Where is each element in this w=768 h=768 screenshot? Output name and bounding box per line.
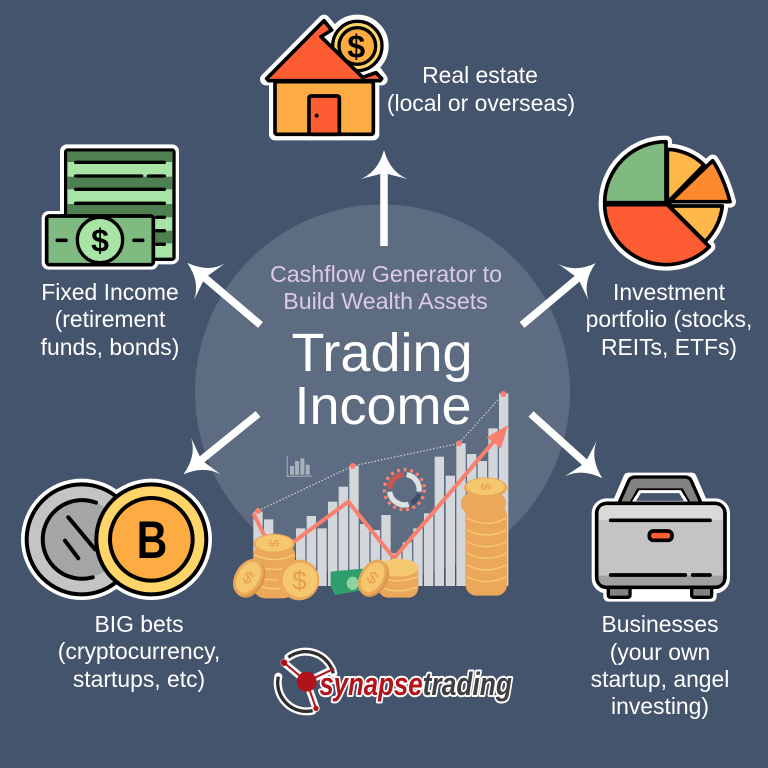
label: fixed income bbox=[41, 279, 179, 360]
coin stack: right bbox=[461, 477, 507, 596]
icon: house with coin: $ bbox=[347, 28, 365, 64]
label: real estate bbox=[387, 62, 575, 116]
logo: synapsetrading: trading bbox=[423, 666, 512, 702]
subtitle bbox=[270, 261, 502, 314]
label: businesses: Businesses bbox=[601, 611, 719, 637]
label: real estate: Real estate bbox=[422, 62, 538, 88]
loose coin: left: $ bbox=[239, 567, 257, 588]
icon: pie chart bbox=[605, 142, 730, 265]
loose coin: left bbox=[226, 553, 272, 603]
donut icon bbox=[384, 470, 424, 510]
logo ring halo bbox=[278, 652, 333, 711]
logo: synapsetrading: synapse bbox=[319, 666, 423, 702]
label: fixed income: Fixed Income bbox=[41, 279, 179, 305]
icon: banknotes and stack: $ bbox=[91, 222, 109, 258]
coin stack: left bbox=[253, 534, 295, 598]
title: Trading Income: Trading bbox=[291, 323, 473, 383]
label: investment portfolio: portfolio (stocks, bbox=[586, 306, 752, 332]
label: businesses: startup, angel bbox=[591, 666, 729, 692]
icon: briefcase bbox=[597, 477, 725, 597]
label: investment portfolio: Investment bbox=[613, 279, 726, 305]
label: fixed income: funds, bonds) bbox=[41, 334, 179, 360]
subtitle: Cashflow Generator to bbox=[270, 261, 502, 287]
icon: house with coin bbox=[266, 21, 383, 134]
coin stack: middle bbox=[378, 559, 418, 598]
icon: coins bbox=[21, 479, 212, 600]
label: investment portfolio bbox=[586, 279, 752, 360]
icon: banknotes and stack bbox=[47, 149, 174, 265]
label: big bets: (cryptocurrency, bbox=[58, 638, 220, 664]
arrow: to big bets bbox=[169, 396, 273, 493]
subtitle: Build Wealth Assets bbox=[283, 288, 488, 314]
label: investment portfolio: REITs, ETFs) bbox=[601, 334, 737, 360]
coin stack: right: $ bbox=[478, 483, 493, 491]
logo ring bbox=[278, 652, 333, 711]
title: Trading Income: Income bbox=[294, 376, 472, 436]
dotted trend line bbox=[255, 391, 506, 514]
logo: synapsetrading bbox=[278, 652, 512, 711]
loose coin: middle bbox=[352, 554, 395, 602]
small bar icon bbox=[287, 456, 312, 477]
label: real estate: (local or overseas) bbox=[387, 90, 575, 116]
central circle bbox=[195, 204, 570, 580]
loose coin: middle: $ bbox=[364, 567, 381, 588]
coin stack: left: $ bbox=[266, 540, 281, 548]
label: fixed income: (retirement bbox=[55, 306, 166, 332]
label: big bets bbox=[58, 611, 220, 692]
label: big bets: BIG bets bbox=[94, 611, 184, 637]
rising arrow line bbox=[253, 425, 508, 558]
arrow: to investment portfolio bbox=[507, 245, 611, 343]
banknotes bbox=[331, 569, 363, 595]
label: big bets: startups, etc) bbox=[73, 666, 205, 692]
dollar coin bbox=[279, 560, 319, 600]
icon: coins: B bbox=[137, 511, 167, 570]
label: businesses: investing) bbox=[611, 693, 709, 719]
arrow: to fixed income bbox=[172, 245, 276, 343]
arrow: up to real estate bbox=[360, 150, 408, 246]
title: Trading Income bbox=[291, 323, 473, 436]
bar chart bbox=[253, 393, 508, 586]
dollar coin: $ bbox=[292, 565, 307, 595]
arrow: to businesses bbox=[515, 397, 618, 496]
chart illustration bbox=[226, 391, 508, 603]
label: businesses bbox=[591, 611, 729, 719]
label: businesses: (your own bbox=[610, 639, 710, 665]
